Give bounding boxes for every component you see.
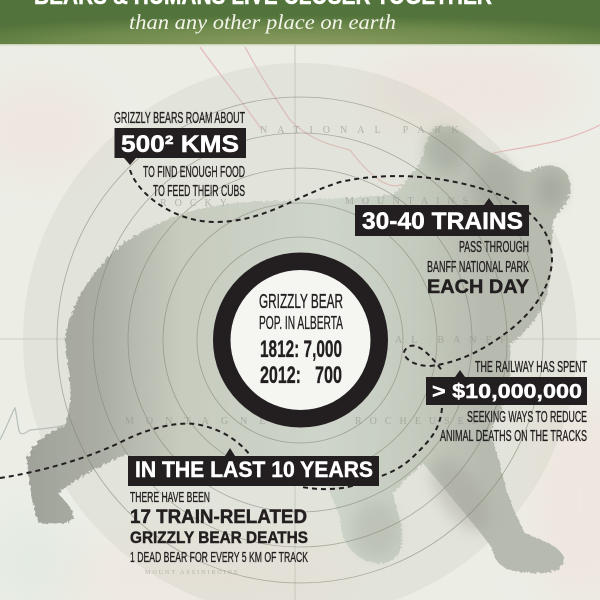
callout: train-related deaths: THERE HAVE BEEN <box>130 489 210 506</box>
callout: 500 square kms: 500² KMS <box>121 131 239 158</box>
map labels: NATIONAL PARK <box>260 125 468 136</box>
callout: 30-40 trains: PASS THROUGH <box>459 239 529 256</box>
central population badge: GRIZZLY BEAR <box>259 291 343 313</box>
central population badge: 2012: <box>260 362 301 389</box>
callout: train-related deaths: GRIZZLY BEAR DEATHS <box>130 529 308 547</box>
callout: 500 square kms: TO FEED THEIR CUBS <box>153 183 245 200</box>
map labels: MOUNTAINS <box>345 196 476 207</box>
header banner: than any other place on earth <box>129 10 396 34</box>
map labels: MOUNT ASSINIBOINE <box>145 570 240 576</box>
callout: train-related deaths: IN THE LAST 10 YEARS <box>135 457 373 482</box>
callout: 30-40 trains: EACH DAY <box>427 276 529 298</box>
callout: railway spending <box>426 359 587 445</box>
callout: 30-40 trains <box>355 198 529 298</box>
callout: 30-40 trains: BANFF NATIONAL PARK <box>427 259 529 276</box>
header banner <box>0 0 600 46</box>
central population badge: 1812: 7,000 <box>260 336 342 363</box>
map labels: AL BANFF <box>395 335 515 346</box>
central population badge: POP. IN ALBERTA <box>259 312 343 333</box>
callout: 500 square kms: TO FIND ENOUGH FOOD <box>143 164 245 181</box>
bear silhouette <box>27 126 570 573</box>
map labels: ROCKY <box>160 198 235 209</box>
callout: train-related deaths <box>128 448 379 566</box>
map labels: ROCHEUSES <box>355 416 485 427</box>
central population badge <box>213 252 388 428</box>
concentric range rings <box>57 97 543 583</box>
callout: 500 square kms: GRIZZLY BEARS ROAM ABOUT <box>114 110 245 127</box>
callout: train-related deaths: 17 TRAIN-RELATED <box>130 506 307 528</box>
callout: railway spending: > $10,000,000 <box>432 380 582 403</box>
dashed train route <box>0 170 552 489</box>
callout: 500 square kms <box>114 110 246 200</box>
callout: 30-40 trains: 30-40 TRAINS <box>362 208 523 235</box>
map labels: MONTAGNES <box>125 416 295 427</box>
map labels <box>125 125 515 576</box>
central population badge: 700 <box>315 362 342 389</box>
callout: train-related deaths: 1 DEAD BEAR FOR EVERY 5 KM OF TRACK <box>130 549 308 566</box>
